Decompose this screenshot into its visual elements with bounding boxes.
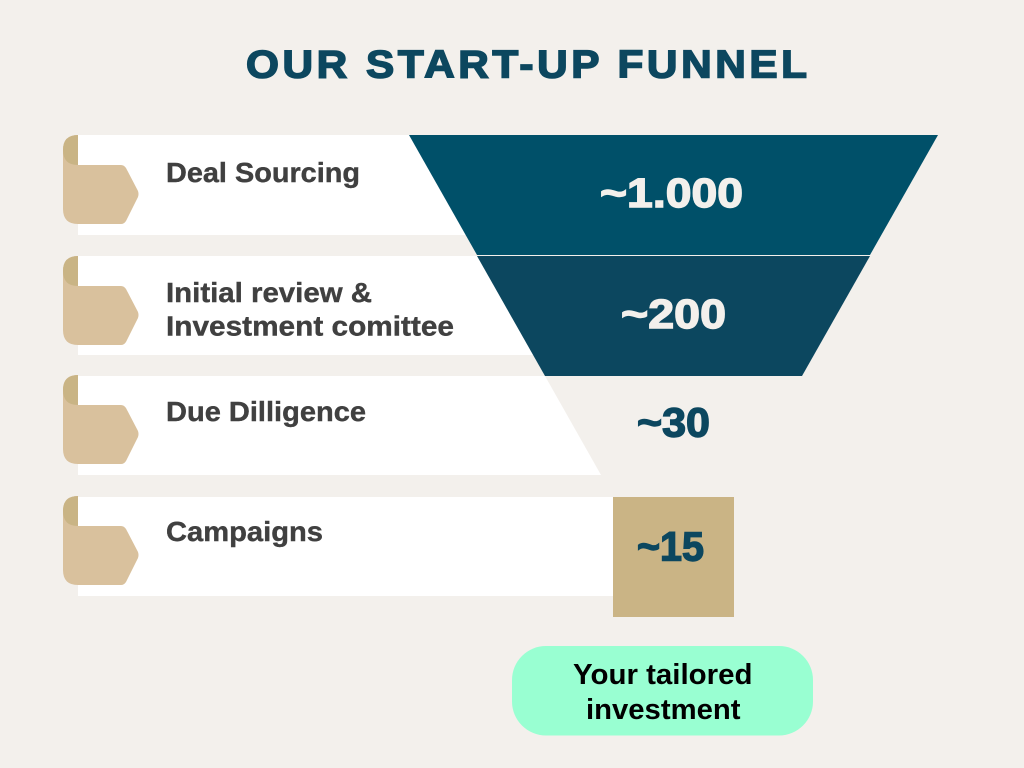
label: initial review and investment committee: Investment comittee	[166, 310, 454, 342]
label: due diligence: Due Dilligence	[166, 396, 366, 427]
label: initial review and investment committee	[166, 277, 454, 342]
callout: your tailored investment: investment	[586, 694, 741, 726]
label: deal sourcing: Deal Sourcing	[166, 157, 360, 188]
label: initial review and investment committee: Initial review &	[166, 277, 372, 308]
icon: initial review tag	[63, 256, 138, 345]
funnel tier: 15: ~15	[637, 524, 704, 570]
funnel tier: 30: ~30	[637, 400, 710, 446]
callout: your tailored investment	[512, 646, 813, 736]
funnel tier: 200: ~200	[621, 291, 726, 337]
panel: deal sourcing	[63, 135, 467, 235]
panel: initial review	[63, 256, 535, 355]
icon: due diligence tag	[63, 375, 138, 464]
icon: campaigns tag	[63, 496, 138, 585]
funnel tier: 1000: ~1.000	[600, 170, 743, 216]
callout: your tailored investment: Your tailored	[573, 659, 752, 691]
funnel tier: 200	[477, 256, 870, 376]
icon: deal sourcing tag	[63, 135, 138, 224]
funnel tier: 1000	[409, 135, 938, 255]
label: campaigns: Campaigns	[166, 516, 323, 547]
panel: due diligence	[63, 375, 601, 475]
funnel tier: 15	[613, 497, 734, 617]
title: OUR START-UP FUNNEL	[246, 42, 807, 86]
panel: campaigns	[63, 496, 614, 596]
